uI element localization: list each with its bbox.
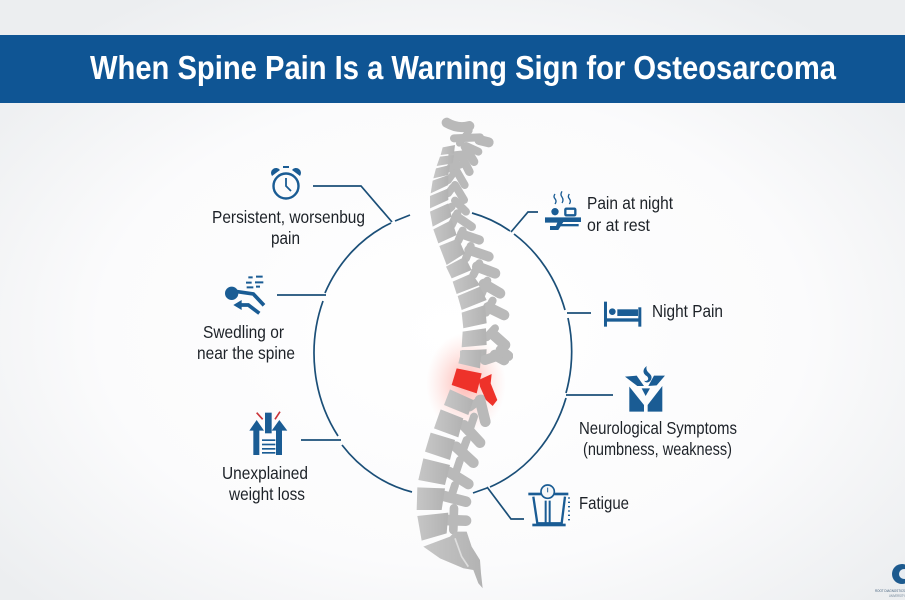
- item: persistent pain: [212, 166, 365, 248]
- header band: [0, 35, 905, 103]
- upper spine: [430, 123, 505, 360]
- label: [222, 463, 308, 504]
- icon: bed: [604, 302, 641, 327]
- label: or at rest: [587, 215, 650, 235]
- icon: resting tray: [545, 191, 581, 230]
- lower spine: [417, 350, 508, 588]
- label: Swedling or: [203, 322, 284, 342]
- label: pain: [271, 228, 300, 248]
- icon: scale: [528, 485, 569, 526]
- label: weight loss: [228, 484, 305, 504]
- label: near the spine: [197, 343, 295, 363]
- label: [212, 207, 365, 248]
- label: Unexplained: [222, 463, 308, 483]
- label: Neurological Symptoms: [579, 418, 737, 438]
- spine illustration: [417, 123, 508, 588]
- icon: alarm clock: [271, 166, 301, 198]
- icon: swelling: [225, 277, 264, 313]
- red glow around tumour: [426, 333, 506, 433]
- item: pain at night or rest: [545, 191, 673, 235]
- item: night pain: [604, 301, 723, 327]
- ring with connector lines: [277, 186, 613, 519]
- label: Night Pain: [652, 301, 723, 321]
- label: Pain at night: [587, 193, 673, 213]
- icon: arrows and spine: [249, 412, 287, 455]
- item: neurological symptoms: [579, 366, 737, 459]
- item: swelling: [197, 277, 295, 363]
- label: [579, 418, 737, 459]
- label: Fatigue: [579, 493, 629, 513]
- icon: open box with flame: [625, 366, 665, 412]
- label: [587, 193, 673, 235]
- tumour vertebra: [452, 368, 497, 406]
- label: [197, 322, 295, 363]
- item: fatigue: [528, 485, 629, 526]
- item: weight loss: [222, 412, 308, 504]
- label: (numbness, weakness): [583, 439, 732, 459]
- logo badge, bottom right: [875, 564, 905, 598]
- label: Persistent, worsenbug: [212, 207, 365, 227]
